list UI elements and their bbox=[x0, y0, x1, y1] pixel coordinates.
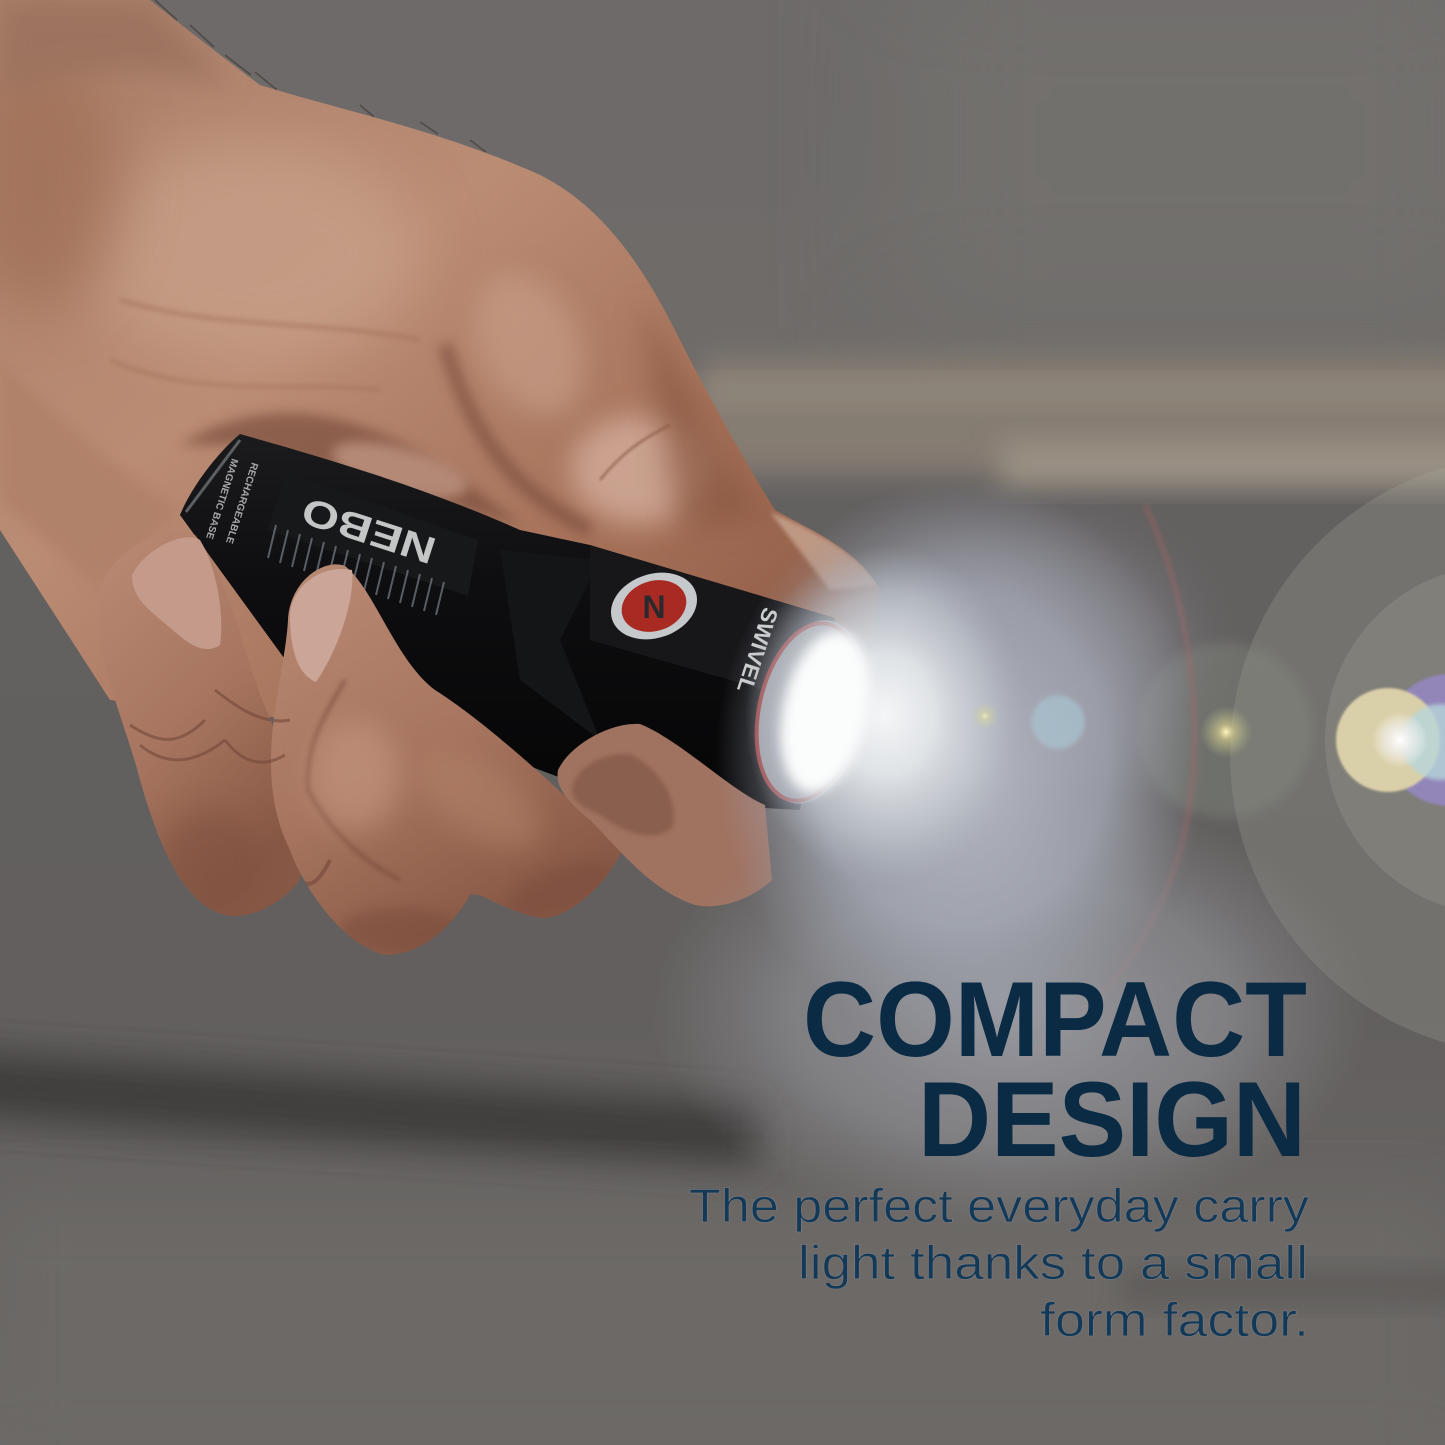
brand text: NEBO: NEBO bbox=[297, 488, 441, 571]
title: COMPACT DESIGN: COMPACT bbox=[803, 959, 1307, 1079]
finger: index bbox=[557, 724, 772, 906]
title: COMPACT DESIGN bbox=[803, 959, 1307, 1179]
flashlight bbox=[180, 434, 882, 814]
finger: middle bbox=[271, 564, 622, 955]
description text bbox=[689, 1179, 1310, 1346]
hand: fingers bbox=[98, 531, 772, 955]
flashlight body bbox=[180, 434, 835, 810]
small text: magnetic base: MAGNETIC BASE bbox=[203, 457, 240, 541]
power button bbox=[602, 562, 706, 650]
title: COMPACT DESIGN: DESIGN bbox=[918, 1059, 1306, 1179]
nail: middle finger bbox=[290, 569, 352, 682]
lens flares bbox=[963, 455, 1445, 1060]
flashlight beam glow bbox=[650, 480, 1370, 1230]
finger shadows and creases bbox=[129, 679, 538, 948]
model text: SWIVEL: SWIVEL bbox=[732, 604, 783, 696]
lens bezel bbox=[741, 610, 882, 814]
arm hair along the hand edge bbox=[155, 0, 486, 152]
small text: rechargeable base: RECHARGEABLE bbox=[223, 461, 260, 545]
description text: form factor. bbox=[1040, 1293, 1309, 1346]
finger: ring bbox=[98, 531, 301, 916]
hand: palm and thumb bbox=[0, 0, 880, 720]
power button: N bbox=[642, 589, 666, 625]
description text: light thanks to a small bbox=[798, 1236, 1308, 1289]
nail: ring finger bbox=[132, 537, 221, 649]
nail: index finger bbox=[572, 754, 674, 836]
description text: The perfect everyday carry bbox=[689, 1179, 1310, 1232]
